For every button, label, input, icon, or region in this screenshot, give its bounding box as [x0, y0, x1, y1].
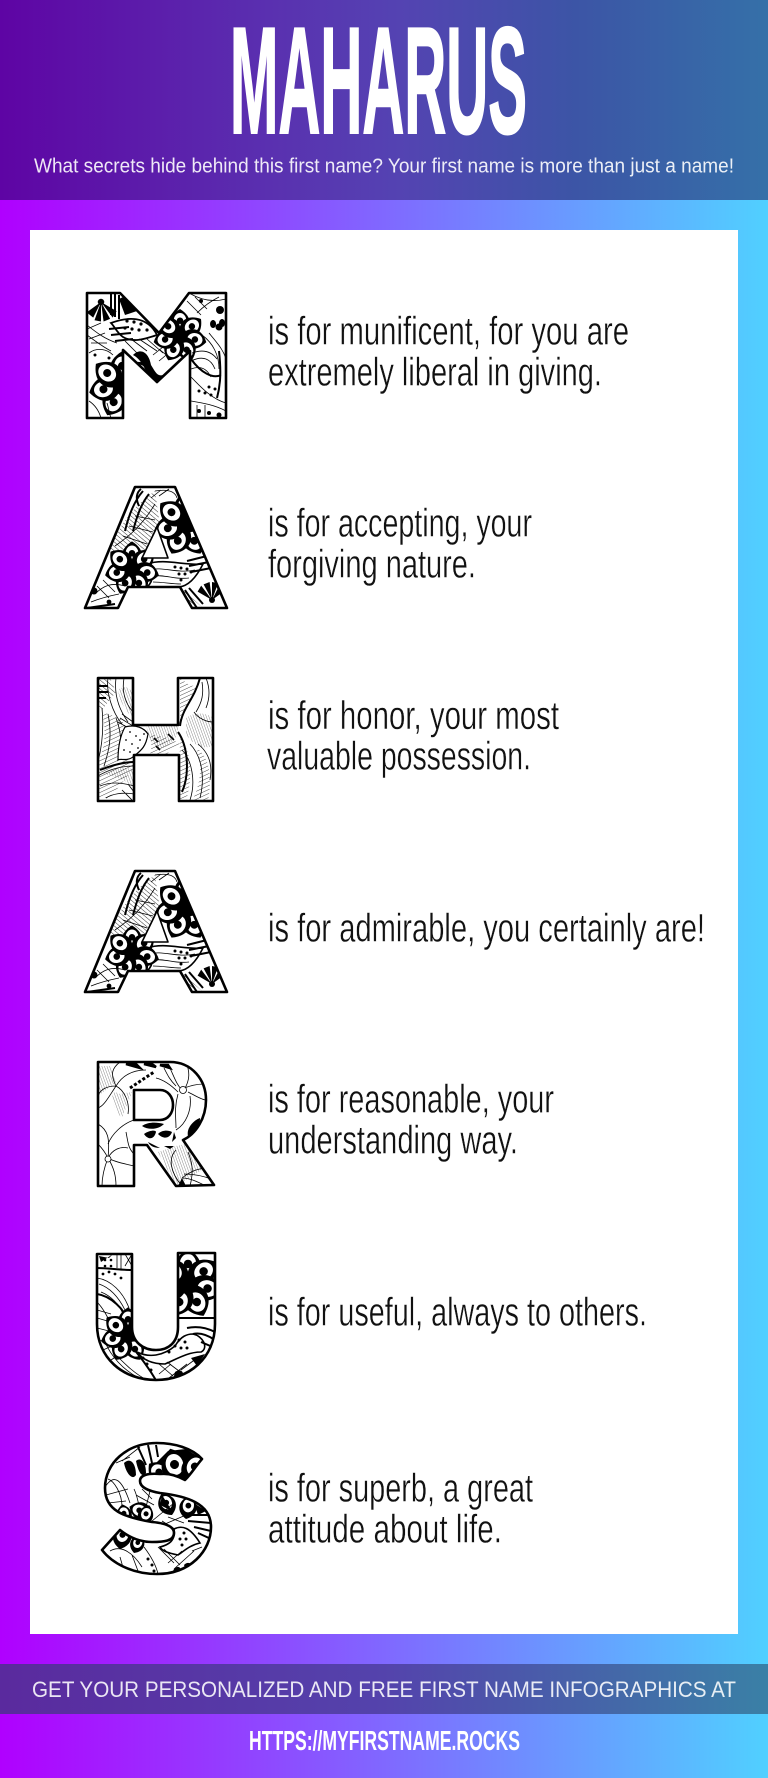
footer band: [0, 1664, 768, 1714]
text: A line: [268, 502, 532, 586]
icon: doodle letter A: [84, 486, 228, 610]
icon: doodle letter R: [96, 1060, 216, 1188]
header band: [0, 0, 768, 200]
icon: doodle letter M: [86, 292, 228, 420]
panel: white letters panel: [30, 230, 738, 1634]
text: M line: [268, 309, 629, 395]
icon: doodle letter U: [96, 1252, 216, 1382]
icon: doodle letter A (second): [84, 870, 228, 994]
text: H line: [267, 694, 559, 778]
text: A line: forgiving nature.: [268, 542, 476, 586]
icon: doodle letter H: [96, 676, 214, 802]
text: S line: [268, 1467, 533, 1552]
text: R line: [268, 1077, 554, 1162]
icon: doodle letter S: [100, 1442, 212, 1576]
